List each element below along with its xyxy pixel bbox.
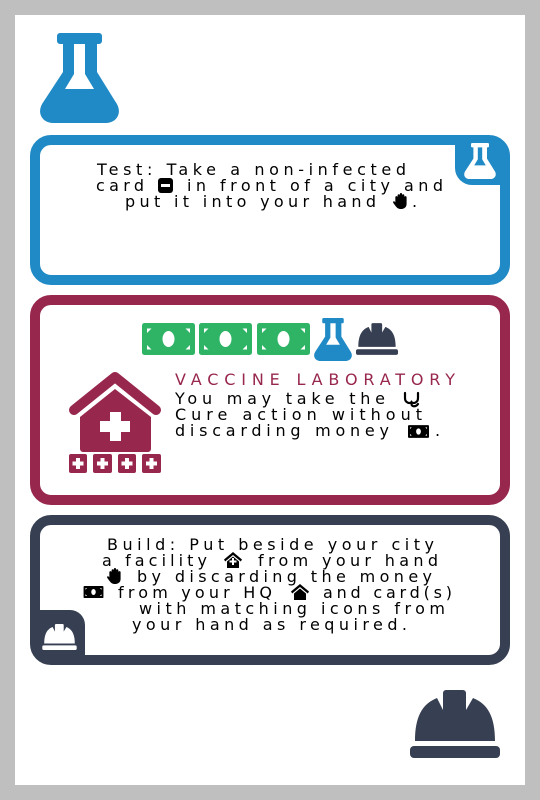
vaccine rule text [174, 389, 440, 440]
build rule text: by discarding the money [137, 567, 432, 586]
icon: money [408, 425, 429, 438]
build rule text: Build: Put beside your city [107, 535, 434, 554]
test rule text: in front of a city and [187, 176, 443, 195]
build rule text: a facility [102, 551, 207, 570]
icon: large flask [40, 33, 119, 123]
vaccine rule text: You may take the [174, 389, 385, 408]
panel: build [30, 520, 505, 665]
panel: test [35, 135, 510, 280]
icon: facility house [224, 552, 242, 568]
test rule text: card [96, 176, 144, 195]
icon: hand [107, 568, 121, 584]
vaccine rule text: . [435, 421, 440, 440]
icon: HQ house [291, 584, 309, 600]
icon: laboratory house [69, 377, 161, 473]
test rule text: . [412, 192, 417, 211]
icon: stethoscope [405, 393, 418, 406]
build rule text: your hand as required. [132, 615, 407, 634]
icon: large helmet [410, 690, 500, 758]
heading: vaccine laboratory: VACCINE LABORATORY [175, 370, 455, 389]
cost icons [142, 318, 398, 361]
build rule text [84, 535, 452, 634]
build rule text: from your hand [258, 551, 438, 570]
test rule text [96, 160, 443, 211]
icon tab: flask [455, 135, 510, 185]
icon: money [84, 586, 103, 598]
icon: card [158, 178, 173, 193]
icon tab: helmet [30, 610, 85, 665]
icon: hand [393, 193, 407, 209]
test rule text: put it into your hand [125, 192, 376, 211]
build rule text: and card(s) [323, 583, 452, 602]
build rule text: with matching icons from [139, 599, 445, 618]
vaccine rule text: Cure action without [175, 405, 422, 424]
test rule text: Test: Take a non-infected [96, 160, 406, 179]
panel: vaccine laboratory [35, 300, 505, 500]
build rule text: from your HQ [118, 583, 272, 602]
vaccine rule text: discarding money [175, 421, 389, 440]
